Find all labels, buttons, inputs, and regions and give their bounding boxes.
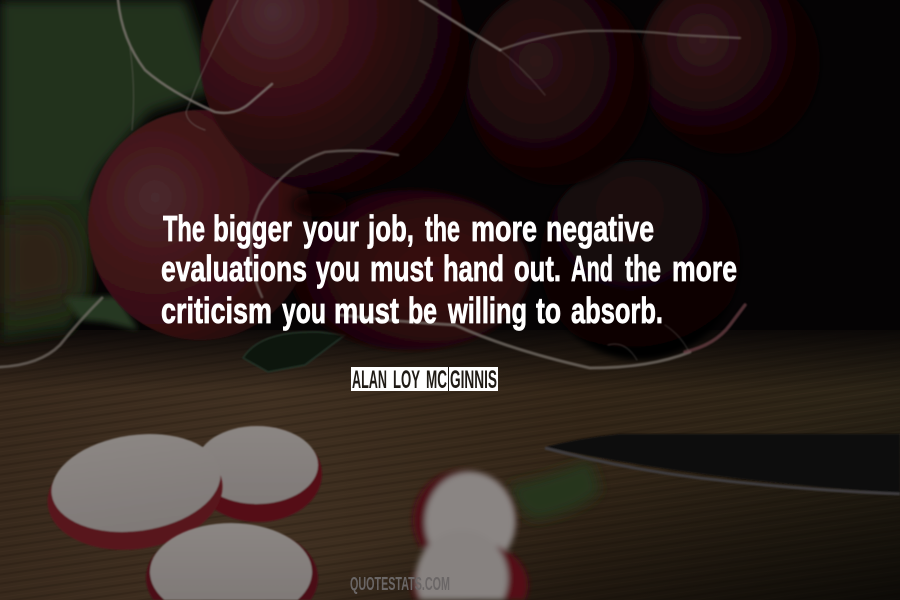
quote line 2 [161, 248, 737, 289]
author name: MC [426, 366, 447, 394]
quote line 1: job, [367, 208, 414, 249]
knife [545, 434, 900, 494]
quote line 3: criticism [161, 290, 272, 331]
top left big radish [200, 0, 470, 193]
quote line 3: absorb. [571, 290, 663, 331]
radish cluster [88, 0, 820, 360]
quote line 3: you [282, 290, 326, 331]
quote line 3: willing [447, 290, 527, 331]
right lower radish [540, 160, 740, 360]
quote line 2: the [625, 248, 661, 289]
left radish [88, 110, 312, 340]
author name [352, 366, 497, 394]
far right radish [640, 0, 820, 154]
slice left [40, 424, 230, 561]
quote line 2: you [316, 248, 360, 289]
quote line 1: bigger [213, 208, 292, 249]
author name: LOY [393, 366, 420, 394]
author name: ALAN [352, 366, 387, 394]
herb sprig [510, 460, 600, 520]
dark gap shadow [292, 193, 348, 217]
quote line 2: must [370, 248, 433, 289]
quote line 3: be [408, 290, 437, 331]
quote line 2: And [571, 248, 613, 289]
quote line 1: The [163, 208, 205, 249]
author label [351, 366, 498, 394]
dark leaf under radishes [243, 332, 345, 372]
quote line 2: hand [443, 248, 504, 289]
quote line 3 [161, 290, 663, 331]
quote line 1: the [425, 208, 460, 249]
brown patch left [0, 215, 78, 315]
top center radish [466, 0, 650, 185]
quote line 1: more [471, 208, 537, 249]
radish slices [40, 424, 600, 600]
quote line 2: evaluations [161, 248, 307, 289]
author name: GINNIS [450, 366, 497, 394]
quote line 3: to [536, 290, 561, 331]
quote line 1 [163, 208, 654, 249]
slices right [412, 470, 528, 600]
slice bottom [146, 523, 318, 600]
quote text [161, 208, 737, 331]
watermark: QUOTESTATS.COM [350, 574, 450, 594]
small green leaf left [65, 296, 138, 330]
radish roots [0, 0, 745, 368]
quote line 2: more [672, 248, 737, 289]
quote line 1: negative [546, 208, 654, 249]
quote line 3: must [334, 290, 399, 331]
wooden board [0, 330, 900, 600]
slice behind [194, 426, 322, 522]
green leaf [0, 0, 215, 340]
quote line 2: out. [514, 248, 561, 289]
center lower radish [290, 190, 530, 350]
quote line 1: your [303, 208, 359, 249]
